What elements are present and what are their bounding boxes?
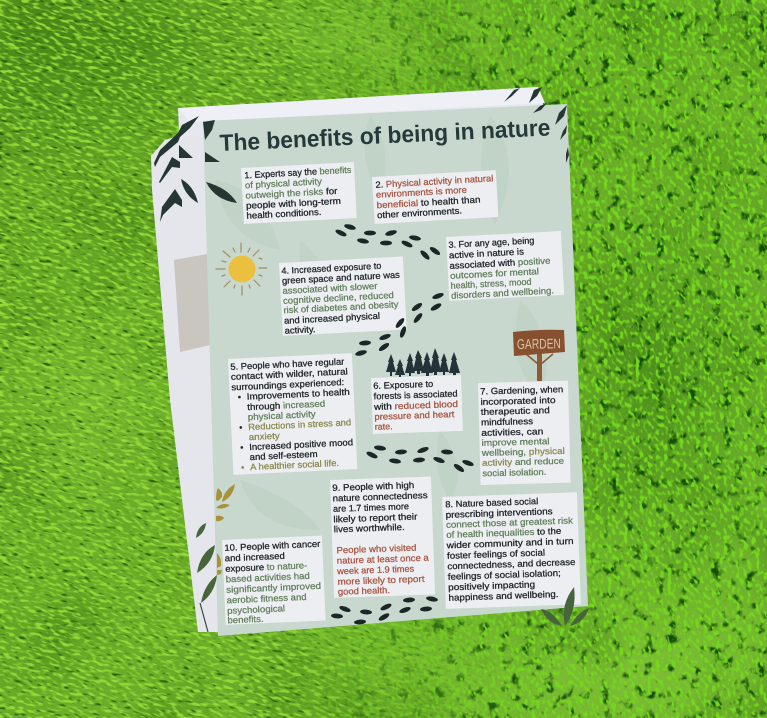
box 4: 4. Increased exposure to bbox=[281, 261, 382, 276]
box 9: likely to report their bbox=[333, 511, 418, 524]
box 8: foster feelings of social bbox=[447, 547, 545, 561]
box 6: pressure and heart bbox=[374, 409, 455, 422]
icon: footprints 1 bbox=[335, 223, 441, 261]
leaves on back sheet bbox=[154, 87, 542, 222]
icon: footprints 4 bbox=[331, 596, 438, 625]
icon: green leaves bottom left bbox=[196, 523, 217, 632]
box 7: activities, can bbox=[481, 426, 543, 438]
box 5: • bbox=[238, 392, 241, 402]
box 10: based activities had bbox=[226, 571, 310, 584]
box 4 bbox=[279, 257, 407, 336]
box 7: wellbeing, physical bbox=[481, 446, 565, 458]
icon: green leaves bottom right bbox=[541, 587, 589, 626]
box 7: mindfulness bbox=[481, 416, 534, 427]
back sheets bbox=[151, 87, 545, 632]
box 10: benefits. bbox=[227, 614, 264, 625]
box 7: 7. Gardening, when bbox=[480, 384, 563, 396]
title: The benefits of being in nature bbox=[219, 114, 551, 156]
box 4: risk of diabetes and obesity bbox=[283, 299, 399, 315]
box 8: positively impacting bbox=[448, 579, 535, 592]
icon: sun bbox=[216, 243, 267, 295]
box 8: happiness and wellbeing. bbox=[448, 589, 559, 603]
box 4: activity. bbox=[284, 324, 316, 336]
box 1: people with long-term bbox=[246, 196, 341, 211]
faint background foliage bbox=[215, 115, 547, 530]
box 8: connectedness, and decrease bbox=[447, 557, 576, 571]
icon: garden sign bbox=[513, 330, 565, 381]
box 3: associated with positive bbox=[449, 256, 551, 271]
box 4: green space and nature was bbox=[282, 270, 401, 286]
box 10 bbox=[222, 536, 326, 625]
box 8 bbox=[442, 492, 581, 609]
box 5: • bbox=[239, 422, 243, 433]
box 10: psychological bbox=[227, 603, 285, 616]
box 5: Reductions in stress and bbox=[248, 417, 351, 432]
box 1: of physical activity bbox=[245, 176, 323, 190]
box 8: wider community and in turn bbox=[445, 536, 574, 550]
box 7 bbox=[478, 381, 571, 485]
box 5 bbox=[228, 353, 357, 475]
box 4: cognitive decline, reduced bbox=[283, 290, 394, 306]
box 2: environments is more bbox=[376, 185, 467, 200]
box 7: incorporated into bbox=[480, 395, 556, 407]
box 7: improve mental bbox=[481, 436, 550, 448]
box 9: People who visited bbox=[336, 543, 417, 555]
box 6: with reduced blood bbox=[373, 399, 458, 412]
icon: footprints 3 bbox=[366, 445, 474, 473]
box 8: prescribing interventions bbox=[445, 506, 553, 520]
icon: garden sign: GARDEN bbox=[517, 335, 561, 352]
box 10: significantly improved bbox=[226, 581, 321, 595]
box 5: and self-esteem bbox=[249, 449, 318, 462]
box 7: social isolation. bbox=[482, 467, 546, 478]
box 6: rate. bbox=[375, 421, 393, 432]
box 10: and increased bbox=[225, 551, 285, 563]
box 9: are 1.7 times more bbox=[333, 501, 409, 514]
box 8: connect those at greatest risk bbox=[446, 515, 574, 530]
box 3 bbox=[446, 231, 564, 301]
box 5: A healthier social life. bbox=[250, 458, 339, 472]
box 1: outweigh the risks for bbox=[245, 186, 338, 201]
leaves on main sheet bbox=[203, 103, 569, 203]
box 9: good health. bbox=[338, 585, 390, 597]
icon: footprints 2 bbox=[355, 292, 444, 357]
box 5: • bbox=[241, 462, 245, 472]
box 5: Improvements to health bbox=[247, 387, 350, 402]
box 1 bbox=[241, 162, 357, 224]
box 5: surroundings experienced: bbox=[231, 377, 344, 392]
box 6 bbox=[371, 375, 463, 434]
box 5: through increased bbox=[247, 398, 325, 412]
box 4: associated with slower bbox=[282, 281, 378, 296]
box 9 bbox=[330, 476, 435, 598]
box 10: 10. People with cancer bbox=[224, 539, 320, 553]
box 7: therapeutic and bbox=[481, 405, 550, 417]
box 3: 3. For any age, being bbox=[448, 235, 535, 250]
box 4: and increased physical bbox=[284, 311, 380, 326]
box 2: beneficial to health than bbox=[376, 194, 481, 210]
box 3: health, stress, mood bbox=[450, 277, 532, 291]
box 5: physical activity bbox=[248, 409, 316, 422]
box 5: • bbox=[240, 442, 244, 453]
box 9: lives worthwhile. bbox=[334, 522, 405, 534]
box 5: contact with wilder, natural bbox=[231, 366, 348, 382]
box 9: more likely to report bbox=[337, 574, 425, 587]
box 1: health conditions. bbox=[246, 207, 322, 221]
box 9: 9. People with high bbox=[332, 480, 414, 493]
box 9: nature connectedness bbox=[332, 490, 428, 503]
main sheet bbox=[203, 104, 588, 636]
box 3: active in nature is bbox=[449, 246, 525, 260]
box 2 bbox=[372, 170, 498, 224]
box 10: aerobic fitness and bbox=[226, 592, 307, 605]
box 5: anxiety bbox=[248, 431, 280, 442]
box 5: Increased positive mood bbox=[249, 437, 353, 452]
box 1: 1. Experts say the benefits bbox=[244, 165, 352, 180]
box 2: 2. Physical activity in natural bbox=[375, 173, 494, 190]
icon: yellow leaves bbox=[216, 484, 235, 575]
box 6: 6. Exposure to bbox=[373, 379, 433, 391]
box 8: 8. Nature based social bbox=[445, 496, 538, 509]
box 8: feelings of social isolation; bbox=[448, 568, 561, 582]
box 5: 5. People who have regular bbox=[230, 357, 344, 372]
icon: pine trees bbox=[386, 348, 460, 378]
box 3: outcomes for mental bbox=[450, 266, 539, 281]
box 9: week are 1.9 times bbox=[336, 564, 415, 576]
box 8: of health inequalities to the bbox=[446, 526, 561, 540]
box 6: forests is associated bbox=[373, 388, 458, 401]
box 3: disorders and wellbeing. bbox=[451, 285, 554, 301]
box 7: activity and reduce bbox=[482, 456, 564, 468]
box 9: nature at least once a bbox=[337, 553, 429, 566]
box 10: exposure to nature- bbox=[225, 560, 307, 574]
box 2: other environments. bbox=[377, 206, 462, 220]
